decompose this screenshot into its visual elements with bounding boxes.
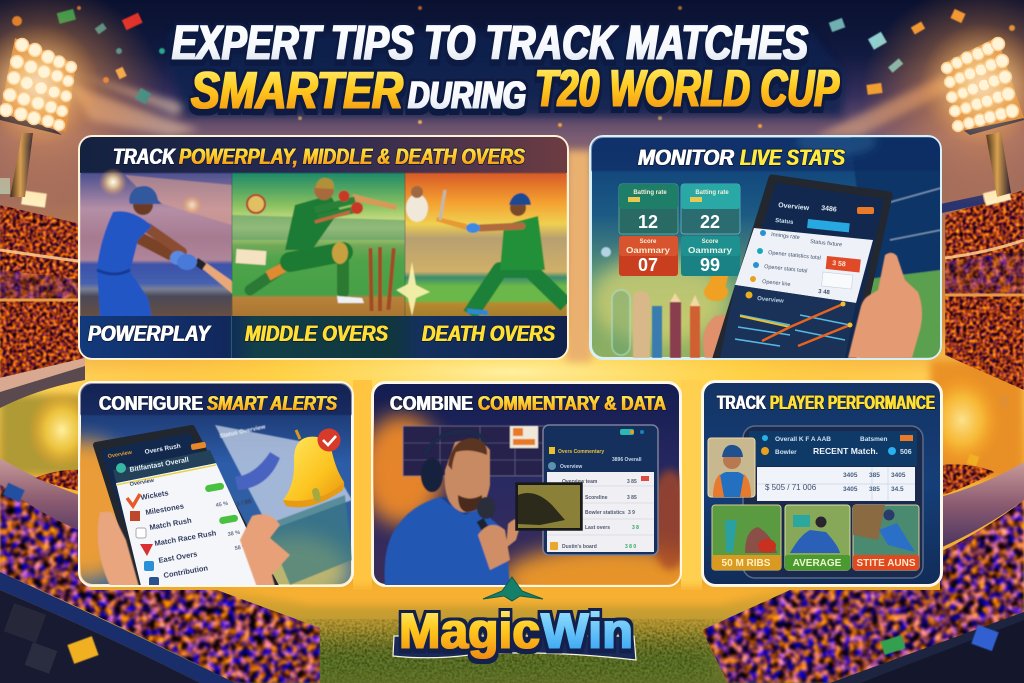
left floodlight: [0, 0, 165, 205]
segment: powerplay batter: [80, 168, 233, 316]
stat cards: Batting rate: [633, 190, 667, 196]
lower right crowd: [702, 500, 1024, 683]
stat cards: Oammary: [688, 246, 733, 255]
panel 2 heading: [638, 145, 845, 170]
tablet: player stats: Batsmen: [860, 436, 887, 443]
phone: alerts app: 58 %: [234, 544, 248, 552]
panel heading band: [80, 137, 567, 173]
tablet: player stats: 385: [869, 472, 880, 479]
tablet: commentary data: 3 9: [628, 510, 635, 516]
over labels: [88, 321, 555, 346]
grass texture: [300, 625, 720, 683]
stat tiles: [712, 505, 919, 570]
tablet: commentary data: 3 8: [632, 525, 639, 531]
logo base: [393, 636, 636, 660]
over labels: MIDDLE OVERS: [245, 321, 388, 346]
logo wordmark: Magic: [399, 603, 540, 659]
phone: live stats app: 3486: [821, 205, 837, 214]
stat numbers: [638, 215, 720, 271]
stat cards: Score: [702, 239, 719, 245]
phone: live stats app: 3 58: [832, 260, 846, 268]
phone: live stats app: Innings rate: [771, 232, 800, 241]
panel art backdrop: [590, 128, 941, 358]
phone: live stats app: 3 48: [818, 289, 831, 296]
panel 4 heading: [390, 393, 666, 415]
tablet: player stats: Bowler: [775, 449, 797, 456]
phone: alerts app: Overview: [107, 450, 133, 460]
stat numbers: 99: [700, 255, 720, 275]
tablet: commentary data: Overs Commentary: [558, 449, 604, 455]
logo star: [483, 577, 543, 601]
tablet: player stats: 3405: [843, 472, 858, 479]
panel 5 heading: TRACK: [717, 393, 766, 414]
grass: [300, 645, 720, 683]
panel: configure smart alerts: [78, 381, 354, 587]
tablet: commentary data: Last overs: [585, 525, 610, 531]
panel art backdrop: 0 1 / 98: [231, 499, 253, 509]
icon: red check badge: [318, 428, 340, 452]
phone: live stats app: Opener line: [762, 279, 791, 288]
glowing gaps: [217, 150, 790, 604]
logo wordmark: Win: [541, 603, 633, 659]
title: DURING: [408, 75, 526, 117]
over labels: POWERPLAY: [88, 321, 212, 346]
tablet: commentary data: Dustin's board: [562, 544, 597, 550]
over label band: [80, 316, 567, 358]
title: [172, 17, 839, 120]
commentator: [385, 432, 522, 586]
tablet: player stats: 506: [900, 449, 912, 456]
panel 5 heading: [717, 393, 935, 414]
phone: live stats app: [716, 178, 889, 358]
phone: live stats app: Status: [775, 218, 794, 226]
panel art backdrop: Status Overview: [219, 424, 266, 440]
icon: holding hand: [848, 253, 922, 358]
title: T20 WORLD CUP: [535, 60, 839, 118]
stadium ring walls: [0, 458, 1024, 548]
panel art backdrop: [373, 400, 680, 585]
tablet: commentary data: [543, 425, 658, 555]
left crowd stands: [0, 178, 85, 408]
stat tiles: STITE AUNS: [856, 558, 916, 569]
field glow left: [0, 395, 100, 475]
phone: alerts app: Bitlfantast Overall: [129, 457, 189, 474]
icon: bell: [283, 430, 344, 507]
phone: live stats app: Overview: [778, 202, 810, 212]
icon: notification ribbon: [235, 452, 280, 490]
panel 3 heading: SMART ALERTS: [207, 393, 338, 415]
stat cards: Oammary: [626, 246, 671, 255]
right crowd stands: [939, 187, 1024, 390]
segment: middle overs batter: [232, 173, 405, 318]
panel: combine commentary and data: [360, 382, 720, 615]
icon: hand behind phone: [702, 314, 726, 358]
phone: alerts app: Match Race Rush: [154, 528, 217, 548]
right floodlight: [860, 0, 1024, 205]
phone: alerts app: Milestones: [145, 501, 185, 517]
tablet: player stats: $ 505 / 71 006: [765, 483, 817, 492]
icon: hand: [98, 512, 290, 590]
phone: alerts app: Contribution: [163, 563, 209, 580]
segment: death overs batter: [396, 173, 567, 318]
tablet: commentary data: 3 85: [627, 479, 637, 485]
tablet: player stats: Overall K F A AAB: [775, 436, 831, 443]
title: EXPERT TIPS TO TRACK MATCHES: [172, 17, 808, 70]
phone: alerts app: Wickets: [140, 488, 169, 502]
panel 5 heading: PLAYER PERFORMANCE: [770, 393, 935, 414]
phone: alerts app: 45 %: [215, 501, 229, 509]
panel 3 heading: [99, 393, 338, 415]
stat tiles: AVERAGE: [793, 558, 842, 569]
tablet: commentary data: 3 85: [627, 495, 637, 501]
phone: live stats app: Status fixture: [810, 239, 842, 248]
panel: track powerplay, middle and death overs: [80, 136, 568, 358]
field glow right: [930, 360, 1024, 480]
panel 3 heading: CONFIGURE: [99, 393, 203, 415]
video inset: [516, 483, 582, 530]
panel: monitor live stats: [590, 128, 941, 358]
panel 4 heading: COMBINE: [390, 393, 473, 415]
tablet: player stats: 3405: [891, 472, 906, 479]
tablet: player stats: 3405: [843, 486, 858, 493]
phone: alerts app: 38 %: [227, 530, 241, 538]
MagicWin logo: [393, 577, 636, 660]
panel art backdrop: [80, 383, 352, 585]
title backing: [170, 32, 845, 116]
phone: alerts app: East Overs: [158, 549, 198, 565]
phone: live stats app: Overview: [757, 296, 784, 305]
panel 4 heading: COMMENTARY & DATA: [478, 393, 666, 415]
tablet: commentary data: Overview: [560, 464, 582, 470]
tablet: commentary data: 3896 Overall: [612, 457, 642, 463]
tablet: commentary data: Bowler statistics: [585, 510, 625, 516]
phone: alerts app: Overview: [129, 478, 155, 488]
stat heading: RECENT Match.: [813, 446, 878, 456]
phone: alerts app: Overs Rush: [144, 443, 181, 456]
tablet: player stats: 34.5: [891, 486, 904, 493]
stat tiles: 50 M RIBS: [722, 558, 771, 569]
lower left crowd: [0, 484, 320, 683]
panel 1 heading: POWERPLAY, MIDDLE & DEATH OVERS: [179, 144, 525, 169]
phone: alerts app: [96, 428, 278, 590]
panel: track player performance: [702, 382, 942, 586]
player card: [708, 438, 755, 497]
bar icons: [610, 276, 729, 358]
tablet: player stats: 385: [869, 486, 880, 493]
phone: live stats app: Opener statistics total: [768, 250, 821, 262]
tablet: commentary data: Overview team: [562, 479, 598, 485]
stat numbers: 22: [700, 212, 720, 232]
panel 1 heading: TRACK: [113, 144, 177, 169]
panel 2 heading: LIVE STATS: [740, 145, 845, 170]
title: SMARTER: [191, 62, 403, 120]
stat cards: Score: [640, 239, 657, 245]
panel 2 heading: MONITOR: [638, 145, 734, 170]
stat cards: Batting rate: [695, 190, 729, 196]
over labels: DEATH OVERS: [422, 321, 555, 346]
stat numbers: 12: [638, 212, 658, 232]
stat cards: [619, 184, 740, 276]
tablet: player stats: [743, 426, 923, 578]
phone: live stats app: Opener stats total: [764, 264, 808, 275]
tablet: commentary data: 3 8 0: [625, 544, 636, 550]
light beams: [70, 75, 950, 136]
stat numbers: 07: [638, 255, 658, 275]
logo wordmark: [399, 603, 633, 659]
phone: alerts app: Match Rush: [149, 516, 193, 532]
tablet: commentary data: Scoreline: [585, 495, 608, 501]
